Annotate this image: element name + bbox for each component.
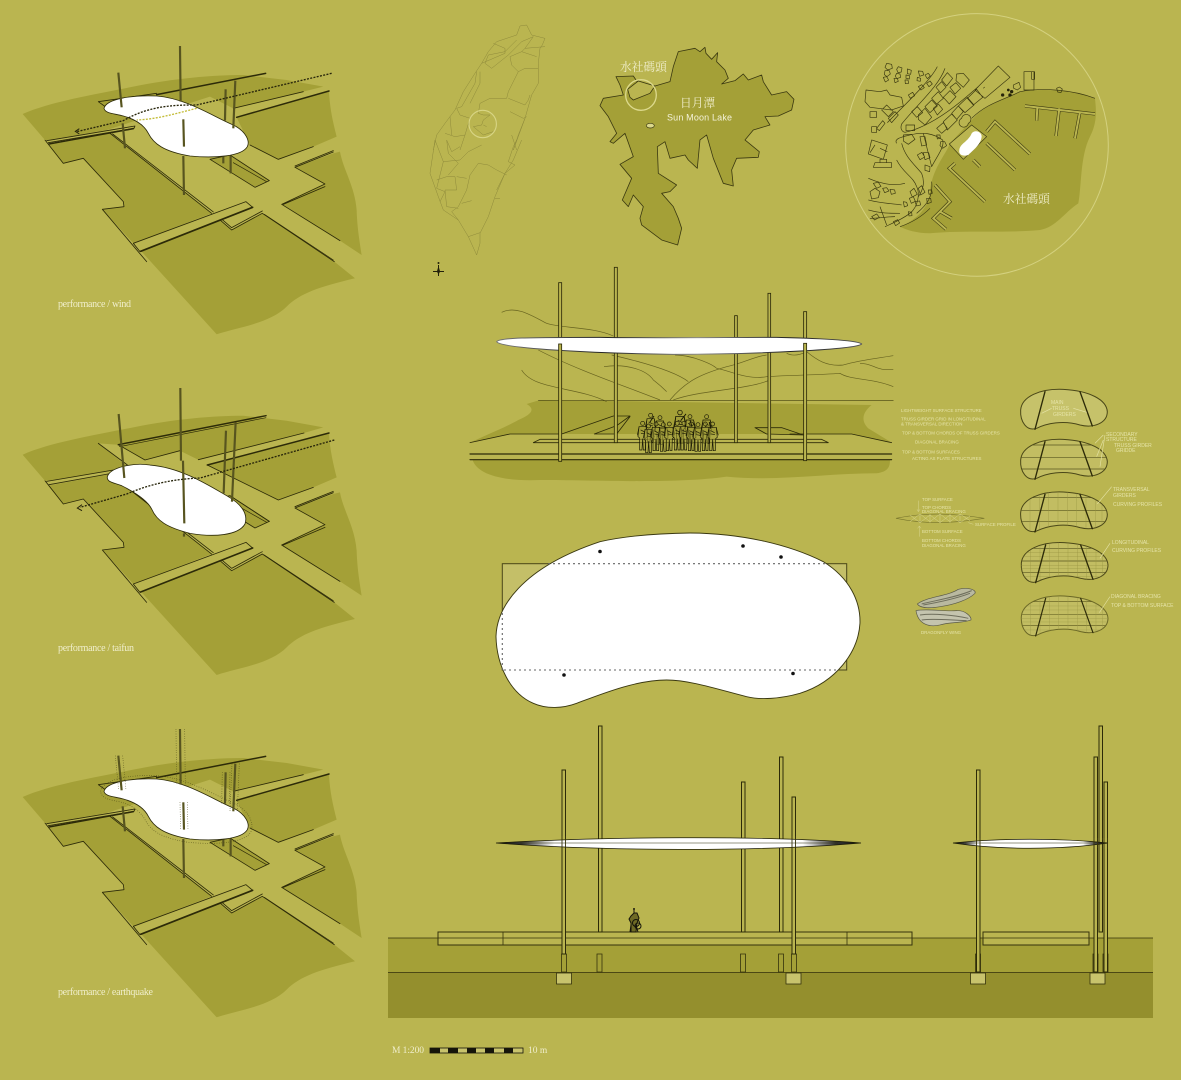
sketch notes: structure stages: TRUSS GIRDER: [1114, 443, 1152, 449]
earthquake dotted displacement outlines: [101, 729, 252, 843]
sketch notes: section labels: TOP CHORDS: [922, 505, 951, 510]
sketch notes: section labels: [922, 497, 1016, 548]
light deck strip: [470, 434, 892, 454]
label: performance earthquake: performance / earthquake: [58, 987, 154, 998]
hills linework: [502, 310, 893, 402]
sketch notes: section labels: SURFACE PROFILE: [975, 522, 1016, 527]
sketch notes: section labels: TOP SURFACE: [922, 497, 953, 502]
masts, right section: [976, 726, 1108, 972]
water and ground tone: [470, 400, 892, 481]
sketch notes: section labels: BOTTOM CHORDS: [922, 538, 961, 543]
sketch notes: lightweight surface structure: ACTING AS PLATE STRUCTURES: [912, 456, 982, 461]
structure diagrams: [896, 389, 1112, 637]
piers: [933, 106, 1095, 229]
sketch note: dragonfly wing: DRAGONFLY WING: [921, 630, 962, 635]
sketch notes: lightweight surface structure: [901, 408, 1000, 461]
label: performance wind: performance / wind: [58, 299, 131, 310]
terrain upper part: [23, 388, 337, 537]
sketch notes: lightweight surface structure: LIGHTWEIGHT SURFACE STRUCTURE: [901, 408, 982, 413]
sketch notes: section labels: DIAGONAL BRACING: [922, 543, 966, 548]
sketch notes: structure stages: CURVING PROFILES: [1112, 548, 1162, 554]
wind path arrow: [75, 73, 332, 134]
sketch notes: lightweight surface structure: TRUSS GIRDER GRID IN LONGITUDINAL: [901, 416, 986, 422]
taifun wind arrow: [77, 440, 334, 511]
dragonfly wing photo: [916, 588, 975, 626]
masts, left section: [562, 726, 796, 954]
sketch notes: structure stages: LONGITUDINAL: [1112, 540, 1149, 546]
southern Taiwan roads: [430, 140, 522, 255]
site water: [900, 90, 1096, 233]
sketch notes: structure stages: DIAGONAL BRACING: [1111, 594, 1161, 600]
roof plan: [496, 533, 860, 707]
sketch notes: lightweight surface structure: TOP & BOTTOM CHORDS OF TRUSS GIRDERS: [902, 430, 1000, 436]
roof in perspective: [497, 337, 862, 354]
label: Shuishe pier: 水社碼頭: [620, 60, 667, 74]
deck left: [438, 932, 912, 945]
front masts: [559, 343, 807, 461]
label: Sun Moon Lake Chinese: 日月潭: [680, 97, 715, 110]
plan frame rectangle: [502, 564, 847, 670]
sketch notes: section labels: DIAGONAL BRACING: [922, 509, 966, 514]
horizon and deck lines: [470, 401, 893, 460]
deck right: [983, 932, 1089, 945]
mast positions: [562, 544, 795, 677]
perspective view: [470, 267, 893, 481]
long section: [388, 726, 1153, 1018]
pavilion footprint: [959, 131, 982, 156]
map of Sun Moon Lake: [600, 47, 794, 245]
group of people: [637, 410, 718, 453]
sketch notes: structure stages: MAIN: [1051, 400, 1064, 406]
sketch notes: structure stages: GIRDERS: [1053, 412, 1076, 418]
column sleeves: [562, 954, 1108, 972]
scale bar: 10 m: [528, 1046, 548, 1056]
back masts: [559, 267, 807, 443]
locator circle on Taiwan: [469, 110, 496, 138]
sketch notes: structure stages: TOP & BOTTOM SURFACE: [1111, 603, 1174, 609]
ground layers: [388, 938, 1153, 972]
site boundary circle: [846, 14, 1108, 276]
sketch notes: structure stages: TRANSVERSAL: [1113, 487, 1150, 493]
footings: [556, 973, 1105, 984]
site plan: [846, 14, 1108, 276]
sketch notes: structure stages: GRIDDE: [1116, 448, 1136, 454]
sketch notes: structure stages: [1051, 400, 1174, 609]
sketch notes: lightweight surface structure: TOP & BOTTOM SURFACES: [902, 450, 960, 454]
sketch notes: lightweight surface structure: & TRANSVERSAL DIRECTION: [901, 422, 962, 426]
stage 1: main truss girders: [1021, 389, 1107, 429]
map of Taiwan: [430, 25, 545, 255]
buildings and landscape linework: [865, 63, 1095, 227]
diagram: performance taifun: [23, 388, 362, 675]
label: performance taifun: performance / taifun: [58, 643, 134, 654]
sketch notes: structure stages: STRUCTURE: [1106, 437, 1137, 443]
sketch notes: structure stages: TRUSS: [1052, 406, 1070, 412]
trees near shore: [1001, 89, 1013, 97]
sketch notes: structure stages: SECONDARY: [1106, 432, 1138, 438]
sketch notes: structure stages: CURVING PROFILES: [1113, 502, 1163, 508]
leader arrows: [1042, 408, 1112, 613]
label: Shuishe pier site: 水社碼頭: [1003, 192, 1050, 206]
stage 2: secondary girders: [1017, 439, 1110, 479]
roof section, long: [496, 838, 861, 849]
hidden structure lines: [502, 564, 838, 670]
stage 4: longitudinal profiles: [1017, 540, 1111, 583]
diagram: performance wind: [23, 46, 362, 334]
sketch notes: lightweight surface structure: DIAGONAL BRACING: [915, 440, 959, 444]
scale bar: [392, 1046, 548, 1056]
stage 3: transversal girders: [1017, 489, 1110, 533]
roof section, short: [953, 839, 1108, 848]
label: Sun Moon Lake: Sun Moon Lake: [667, 112, 732, 122]
cross-section of surface: [896, 501, 984, 537]
sketch notes: structure stages: GIRDERS: [1113, 493, 1136, 499]
northern Taiwan roads: [433, 25, 545, 150]
sketch notes: section labels: BOTTOM SURFACE: [922, 529, 963, 534]
figure on deck: [629, 908, 641, 932]
plan view: [496, 533, 860, 707]
terrain lower part: [45, 474, 362, 675]
stage 5: diagonal bracing: [1017, 593, 1111, 637]
icon: north arrow: [433, 262, 444, 276]
diagram: performance earthquake: [23, 729, 362, 1017]
scale bar: M 1:200: [392, 1046, 424, 1056]
